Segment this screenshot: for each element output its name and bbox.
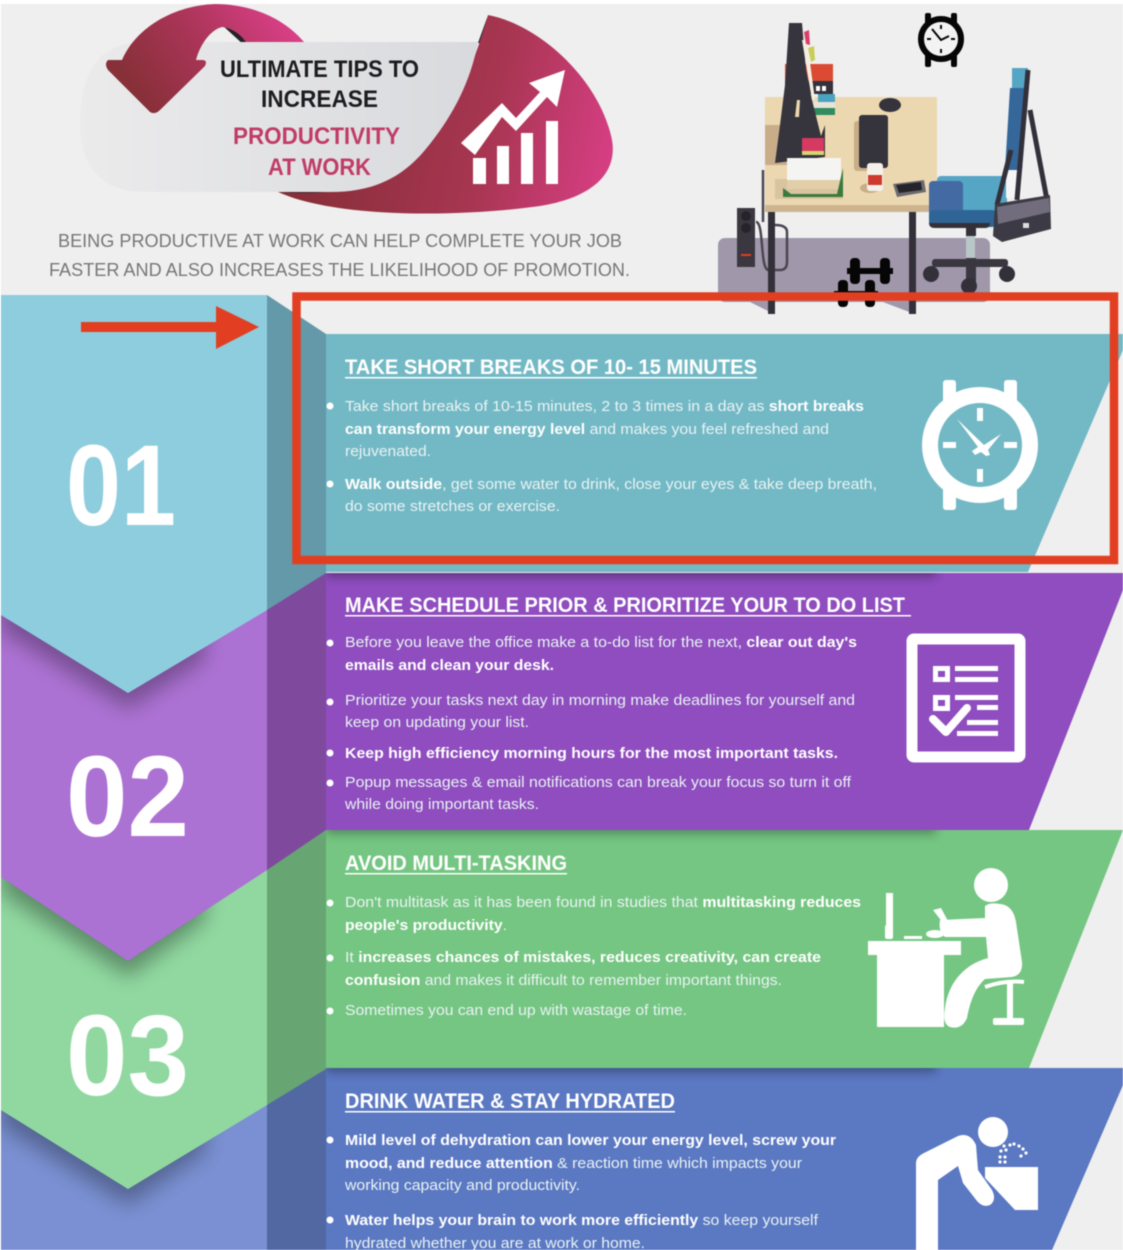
title: ULTIMATE TIPS TO <box>220 56 419 83</box>
intro text: BEING PRODUCTIVE AT WORK CAN HELP COMPLETE YOUR JOB <box>58 230 622 251</box>
body text <box>345 398 877 515</box>
body text: do some stretches or exercise. <box>345 498 560 515</box>
curved arrow <box>106 4 304 113</box>
power strip <box>737 170 787 270</box>
icon: person at drinking fountain <box>916 1117 1038 1250</box>
body text: Sometimes you can end up with wastage of time. <box>345 1002 687 1019</box>
desk legs <box>768 210 775 314</box>
wall clock <box>921 13 961 67</box>
body text: confusion and makes it difficult to remember important things. <box>345 972 782 989</box>
body text <box>344 634 857 813</box>
title <box>220 56 419 181</box>
step numbers: 01 <box>66 422 176 550</box>
intro text: FASTER AND ALSO INCREASES THE LIKELIHOOD OF PROMOTION. <box>49 259 630 280</box>
panel 02 <box>326 573 1123 830</box>
title: INCREASE <box>261 86 378 113</box>
body text: Prioritize your tasks next day in morning make deadlines for yourself and <box>345 692 855 709</box>
document tray <box>775 158 843 199</box>
intro text <box>49 230 630 280</box>
tip 3 content <box>326 852 1024 1028</box>
heading: take short breaks: TAKE SHORT BREAKS OF 10- 15 MINUTES <box>345 356 757 379</box>
bullets <box>326 640 334 786</box>
icon: checklist <box>912 639 1020 757</box>
growth chart icon <box>461 70 565 184</box>
bullets <box>326 1136 334 1224</box>
dumbbells <box>834 258 893 307</box>
body text: It increases chances of mistakes, reduces creativity, can create <box>345 949 821 966</box>
ribbon 01 <box>1 295 326 693</box>
ribbon 02 <box>1 565 326 961</box>
phone <box>893 180 926 197</box>
body text: mood, and reduce attention & reaction time which impacts your <box>345 1155 802 1172</box>
title: AT WORK <box>268 154 372 181</box>
body text: Keep high efficiency morning hours for the most important tasks. <box>345 745 838 762</box>
body text: working capacity and productivity. <box>344 1177 580 1194</box>
desk illustration <box>718 13 1051 314</box>
title: PRODUCTIVITY <box>233 123 400 150</box>
heading: hydrated: DRINK WATER & STAY HYDRATED <box>345 1090 675 1113</box>
red arrow <box>81 306 259 349</box>
heading: schedule: MAKE SCHEDULE PRIOR & PRIORITIZE YOUR TO DO LIST <box>345 594 905 617</box>
mouse <box>879 98 901 112</box>
tip 1 content <box>326 356 1030 515</box>
tip 4 content <box>326 1090 1038 1250</box>
heading: multi-tasking: AVOID MULTI-TASKING <box>345 852 567 875</box>
ribbon 03 <box>1 825 326 1189</box>
body text: Before you leave the office make a to-do list for the next, clear out day's <box>345 634 857 651</box>
step numbers <box>66 422 189 1120</box>
icon: person at desk <box>868 868 1024 1028</box>
body text: people's productivity . <box>345 917 507 934</box>
monitor <box>775 23 825 163</box>
panel 01 <box>326 334 1123 572</box>
shoulder bag <box>993 195 1051 242</box>
body text: Walk outside , get some water to drink, close your eyes & take deep breath, <box>345 476 877 493</box>
grey title card <box>80 42 478 192</box>
body text: Don't multitask as it has been found in studies that multitasking reduces <box>345 894 861 911</box>
red highlight box <box>296 296 1114 560</box>
body text: emails and clean your desk. <box>345 657 554 674</box>
body text: Water helps your brain to work more efficiently so keep yourself <box>345 1212 819 1229</box>
crimson blob <box>278 15 613 214</box>
ribbon 04 <box>1 1060 326 1250</box>
body text: Popup messages & email notifications can break your focus so turn it off <box>345 774 852 791</box>
bullets <box>326 402 334 488</box>
desk top <box>765 97 937 207</box>
coffee cup <box>860 163 883 193</box>
swoosh shadow <box>222 18 495 198</box>
body text: Take short breaks of 10-15 minutes, 2 to 3 times in a day as short breaks <box>345 398 864 415</box>
body text: can transform your energy level and makes you feel refreshed and <box>345 421 829 438</box>
body text <box>345 894 861 1019</box>
tablet <box>854 121 880 171</box>
icon: watch <box>930 380 1030 510</box>
body text: Mild level of dehydration can lower your energy level, screw your <box>345 1132 836 1149</box>
header badge <box>80 4 613 214</box>
body text: keep on updating your list. <box>345 714 529 731</box>
body text: rejuvenated. <box>345 443 431 460</box>
books <box>785 64 833 83</box>
body text: while doing important tasks. <box>344 796 539 813</box>
bullets <box>326 900 334 1014</box>
panel 03 <box>326 830 1123 1068</box>
rug <box>718 238 990 302</box>
body text <box>344 1132 836 1250</box>
tip 2 content <box>326 594 1020 813</box>
panel 04 <box>326 1068 1123 1250</box>
step numbers: 03 <box>66 992 189 1120</box>
chair <box>923 68 1047 294</box>
step numbers: 02 <box>66 733 189 861</box>
